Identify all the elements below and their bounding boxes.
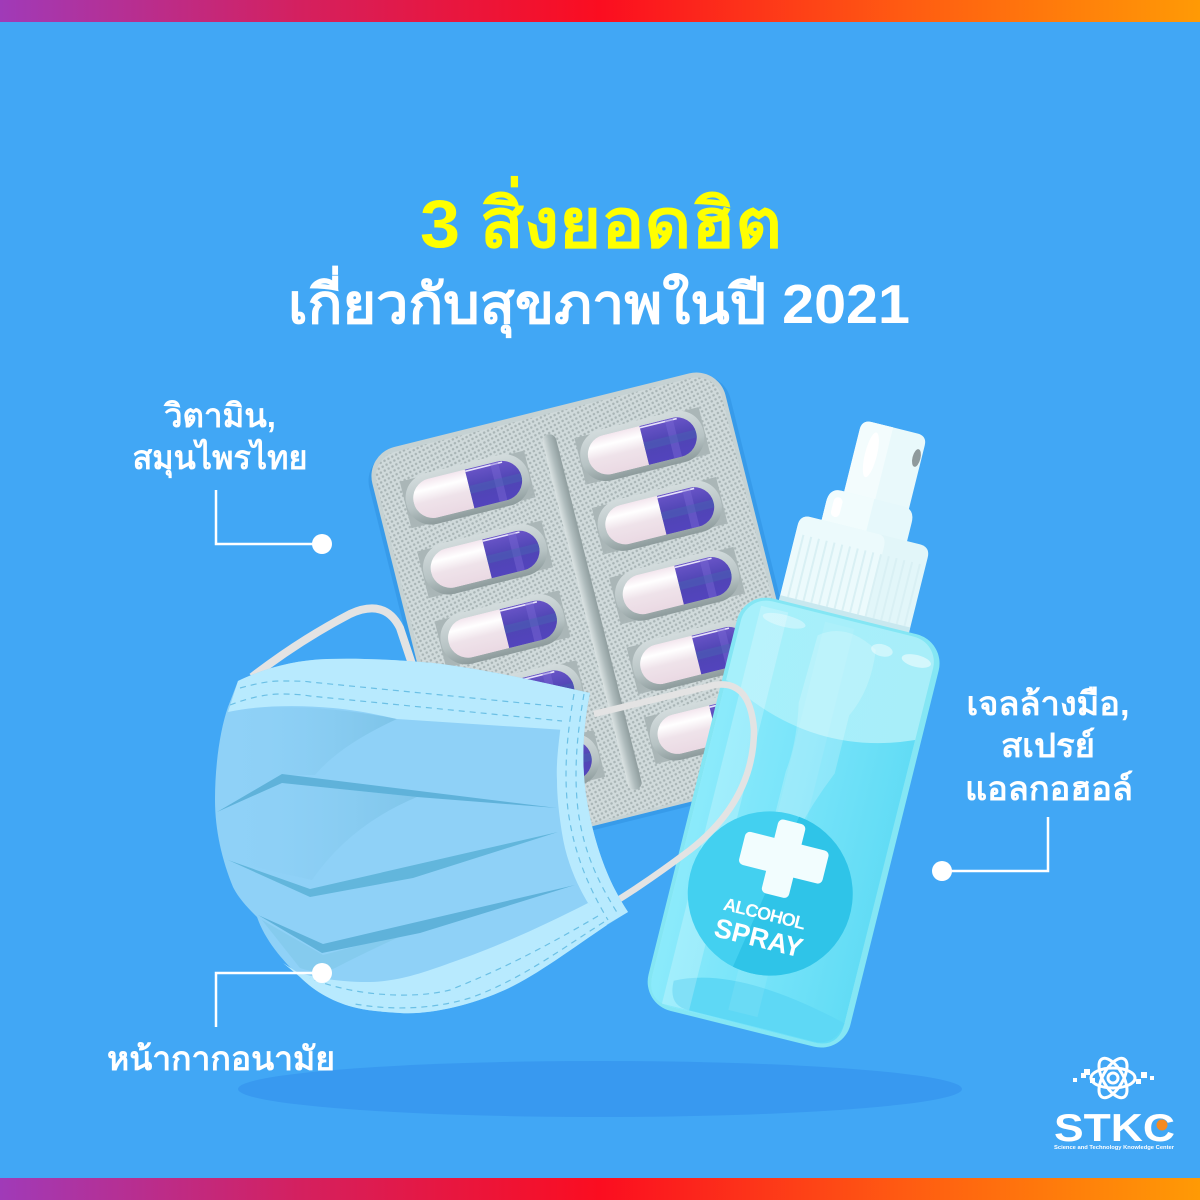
right band: [557, 693, 628, 925]
highlights: [662, 606, 788, 1010]
logo: STKC: [1054, 1054, 1175, 1151]
icon: atom: [1091, 1054, 1135, 1102]
connector: hand gel: [932, 817, 1048, 881]
bottle nozzle: [779, 411, 956, 634]
label: hand gel and alcohol spray: เจลล้างมือ,: [966, 685, 1130, 722]
label: vitamins and Thai herbs: วิตามิน,: [164, 397, 276, 434]
label: hand gel and alcohol spray: [932, 685, 1133, 881]
alcohol spray label: ALCOHOL: [722, 894, 808, 934]
ear loop left: [252, 608, 412, 677]
label: vitamins and Thai herbs: [132, 397, 332, 554]
bottom gradient bar: [0, 1178, 1200, 1200]
connector: vitamins: [216, 490, 332, 554]
fold shading: [220, 707, 397, 810]
label: face mask: [107, 963, 335, 1077]
top band: [228, 659, 590, 730]
title: เกี่ยวกับสุขภาพในปี 2021: [288, 265, 910, 339]
folds: [217, 774, 557, 812]
bottle body: [641, 591, 946, 1054]
illustration: blister pack of capsules: [361, 365, 824, 863]
illustration: surgical mask: [215, 608, 754, 1013]
title: 3 สิ่งยอดฮิต: [420, 175, 782, 262]
connector: mask: [216, 963, 332, 1027]
liquid: [646, 680, 918, 1049]
logo: STKC: Science and Technology Knowledge Center: [1054, 1145, 1175, 1151]
top gradient bar: [0, 0, 1200, 22]
label: hand gel and alcohol spray: แอลกอฮอล์: [965, 770, 1133, 807]
mask body: [215, 659, 628, 1013]
label: hand gel and alcohol spray: สเปรย์: [1001, 727, 1095, 764]
label: vitamins and Thai herbs: สมุนไพรไทย: [132, 438, 308, 479]
label: face mask: หน้ากากอนามัย: [107, 1040, 335, 1077]
ear loop right: [594, 684, 754, 900]
title: [288, 175, 910, 339]
bottom band: [283, 903, 607, 1013]
alcohol spray label: SPRAY: [711, 913, 806, 963]
logo: STKC: STKC: [1054, 1107, 1175, 1150]
illustration: spray bottle: [641, 402, 993, 1054]
floor shadow: [238, 1061, 962, 1117]
stitching: [230, 681, 618, 1008]
alcohol spray label: [670, 794, 870, 993]
